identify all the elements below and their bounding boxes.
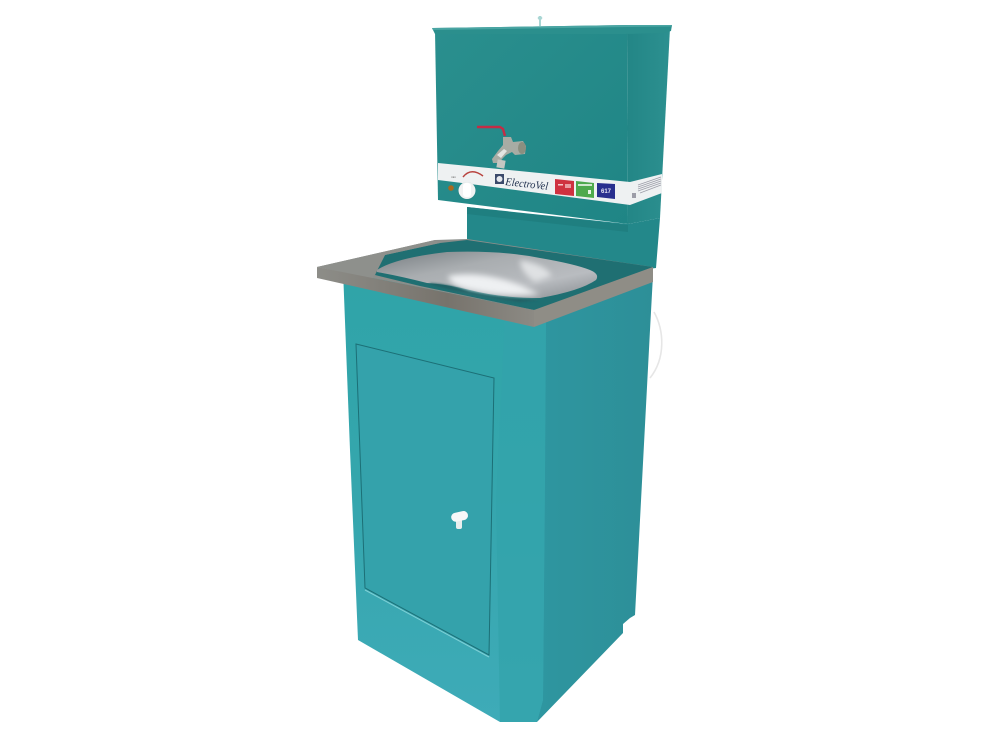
faucet bbox=[477, 127, 526, 169]
counter top bbox=[317, 239, 653, 310]
red lever bbox=[477, 127, 505, 136]
cabinet bbox=[343, 270, 653, 722]
tank side face bbox=[627, 28, 670, 224]
door bbox=[356, 344, 494, 657]
tank bbox=[432, 16, 672, 224]
blue rating badge bbox=[597, 183, 615, 199]
power cable bbox=[650, 312, 662, 378]
chamfer edge bbox=[496, 315, 546, 722]
faucet body bbox=[492, 137, 526, 163]
tank front face bbox=[435, 31, 628, 224]
dial knob bbox=[458, 182, 476, 200]
green rating badge bbox=[576, 181, 594, 198]
counter front edge bbox=[317, 267, 534, 327]
counter side edge bbox=[534, 267, 653, 327]
dial arc bbox=[463, 172, 483, 177]
tank vent knob bbox=[538, 16, 542, 26]
label strip bbox=[438, 163, 662, 205]
brand name: ElectroVel bbox=[504, 176, 549, 193]
tank lid bbox=[432, 25, 672, 34]
cabinet front bbox=[343, 270, 546, 722]
indicator lamp bbox=[448, 185, 454, 191]
cabinet side bbox=[537, 275, 653, 722]
rear support panel bbox=[467, 207, 660, 270]
spec text block bbox=[632, 177, 661, 198]
red rating badge bbox=[555, 179, 574, 196]
brand logo bbox=[495, 174, 549, 193]
sink bbox=[317, 239, 653, 327]
bowl bbox=[377, 252, 597, 302]
blue rating badge: 617 bbox=[601, 189, 612, 195]
door knob bbox=[450, 510, 469, 529]
dial scale labels: min bbox=[451, 175, 456, 179]
